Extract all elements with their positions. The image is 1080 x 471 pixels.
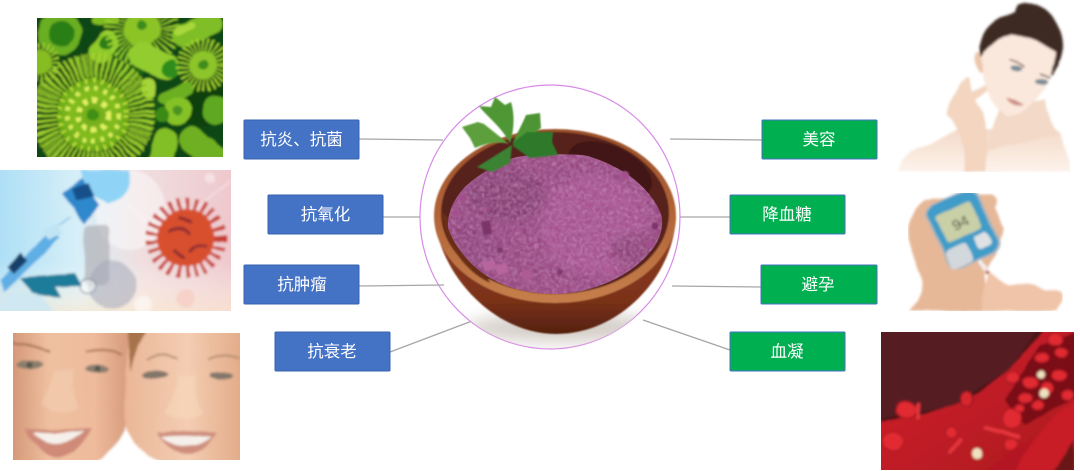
powder <box>448 154 662 294</box>
label: anti-tumor <box>244 265 359 304</box>
label: anti-inflammatory and antibacterial: 抗炎、抗菌 <box>260 130 343 149</box>
connector: anti-inflammatory <box>359 139 443 140</box>
label: antioxidant <box>268 195 383 234</box>
image: woman touching her face <box>898 3 1072 172</box>
connector: beauty <box>670 139 762 140</box>
connector: anti-aging <box>390 321 472 352</box>
label: contraception <box>761 265 877 304</box>
label: anti-inflammatory and antibacterial <box>244 120 359 159</box>
central circle with powder bowl <box>420 85 680 349</box>
label: lowers blood sugar: 降血糖 <box>762 205 812 224</box>
label: contraception: 避孕 <box>802 275 834 294</box>
label: beauty <box>762 120 877 159</box>
powder lumps <box>452 171 658 279</box>
connector: antioxidant <box>383 216 420 218</box>
connector: contraception <box>672 286 761 287</box>
image: green bacteria and viruses <box>37 18 223 157</box>
image: vaccine syringe and red virus <box>0 170 231 311</box>
bowl <box>434 129 676 334</box>
label: anti-aging: 抗衰老 <box>307 342 357 361</box>
label: anti-tumor: 抗肿瘤 <box>277 275 327 294</box>
image: hand holding blood glucose meter: 94 <box>949 213 971 235</box>
image: hand holding blood glucose meter <box>908 185 1063 311</box>
connector: coagulation <box>643 320 730 350</box>
connector: anti-tumor <box>359 285 444 286</box>
label: antioxidant: 抗氧化 <box>301 205 350 224</box>
image: red blood cells in a vessel <box>881 332 1074 470</box>
label: blood coagulation: 血凝 <box>770 342 804 361</box>
connector: blood sugar <box>680 216 730 218</box>
label: beauty: 美容 <box>802 130 836 149</box>
label: anti-aging <box>275 332 390 371</box>
label: lowers blood sugar <box>730 195 845 234</box>
image: young and older woman smiling <box>13 333 240 460</box>
leaf <box>462 97 558 172</box>
label: blood coagulation <box>730 332 845 371</box>
